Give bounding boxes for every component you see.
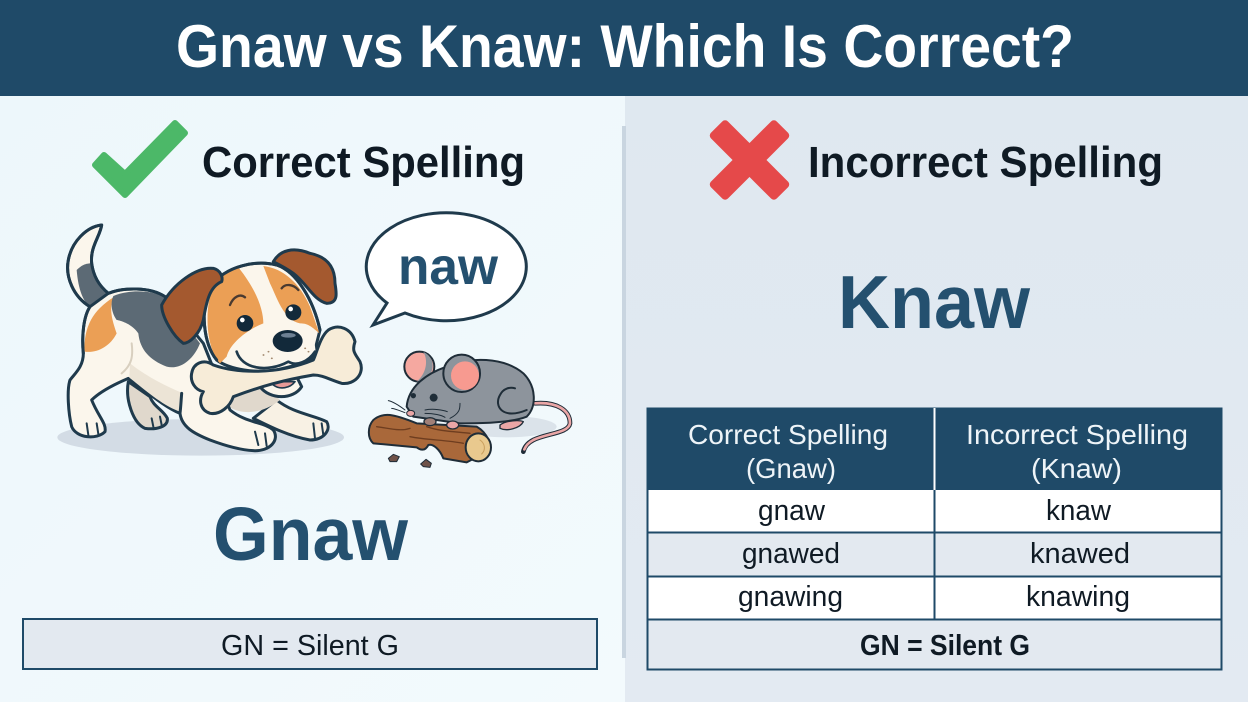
comparison table: Correct Spelling: [688, 419, 888, 450]
comparison table: GN = Silent G: [860, 630, 1030, 662]
comparison table: knawing: [1026, 581, 1130, 613]
title banner: Gnaw vs Knaw: Which Is Correct?: [176, 13, 1074, 80]
speech bubble: naw: naw: [398, 238, 499, 296]
note box: silent G (left): [23, 619, 597, 669]
note box: silent G (left): GN = Silent G: [221, 630, 399, 662]
comparison table: gnawing: [738, 581, 843, 613]
icon: red cross: [708, 119, 791, 201]
panel: incorrect spelling (right background): [625, 96, 1248, 702]
word: Gnaw: Gnaw: [213, 492, 409, 576]
comparison table: knaw: [1046, 495, 1112, 527]
illustration: mouse gnawing a log: [369, 352, 570, 467]
word: Knaw: Knaw: [838, 260, 1031, 344]
heading: incorrect spelling: Incorrect Spelling: [808, 138, 1163, 187]
comparison table: gnaw: [758, 495, 826, 527]
comparison table: (Gnaw): [746, 453, 836, 484]
icon: green check mark: [95, 123, 185, 195]
comparison table: gnawed: [742, 538, 840, 570]
illustration: dog chewing a bone: [57, 225, 361, 456]
title banner: [0, 0, 1248, 96]
comparison table: Incorrect Spelling: [966, 419, 1188, 450]
heading: correct spelling: Correct Spelling: [202, 138, 525, 187]
comparison table: knawed: [1030, 538, 1130, 570]
comparison table: (Knaw): [1031, 453, 1122, 484]
speech bubble: naw: [366, 213, 526, 325]
panel: correct spelling (left background): [0, 96, 625, 702]
comparison table: [647, 408, 1222, 670]
